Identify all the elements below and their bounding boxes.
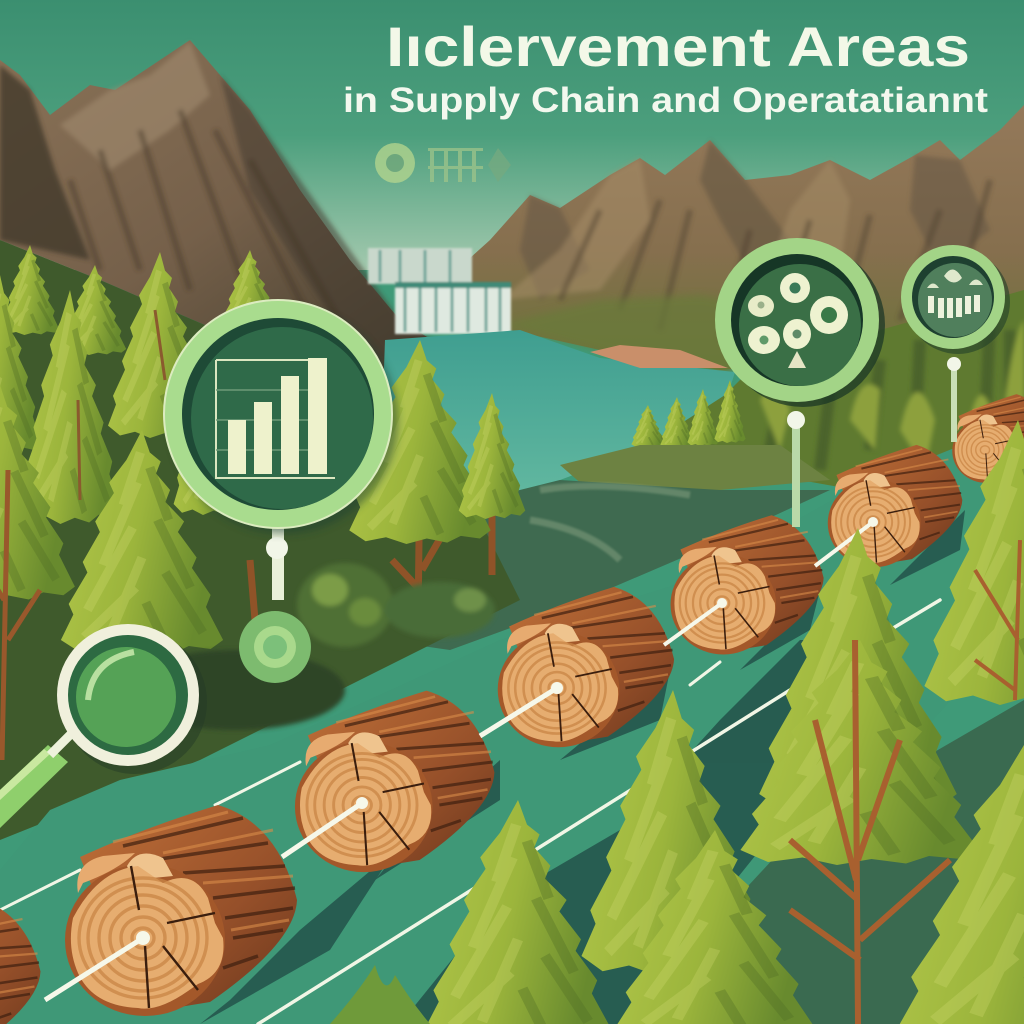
title: Iıclervement Areas bbox=[386, 15, 970, 78]
tree: bottom centre bbox=[424, 800, 612, 1024]
log 2 bbox=[65, 805, 297, 1016]
right mountain range bbox=[440, 105, 1024, 375]
right tree branches bbox=[975, 540, 1020, 700]
tree: bottom right-centre bbox=[616, 830, 814, 1024]
log 7 (far) bbox=[952, 394, 1024, 483]
connector lines and end dots on logs bbox=[45, 517, 878, 1000]
log 5 bbox=[671, 515, 824, 654]
dark forest backdrop left bbox=[0, 240, 520, 840]
magnifying glass lower left bbox=[0, 624, 207, 828]
lake bbox=[380, 330, 735, 500]
central trees by the lake bbox=[250, 340, 525, 622]
white connector lines bbox=[0, 600, 940, 1024]
log 3 bbox=[295, 691, 494, 872]
subtitle: in Supply Chain and Operatatiannt bbox=[343, 81, 988, 120]
ground shadows bbox=[200, 510, 965, 1024]
magnifier badge: columns bbox=[901, 245, 1010, 442]
log row bbox=[0, 394, 1024, 1024]
tree: far right tall bbox=[924, 420, 1024, 705]
small lakeside trees bbox=[631, 380, 746, 448]
dark ground under foreground trees bbox=[620, 700, 1024, 1024]
title bbox=[343, 15, 988, 120]
magnifier badge: circles bbox=[715, 238, 885, 527]
fern bbox=[330, 965, 430, 1024]
shrubs bbox=[125, 563, 495, 730]
log 1 (partial, left edge) bbox=[0, 900, 40, 1024]
left mountain bbox=[0, 40, 475, 370]
foreground trees bbox=[330, 420, 1024, 1024]
tree: centre conifer bbox=[759, 528, 957, 813]
log 4 bbox=[498, 587, 674, 747]
sky background bbox=[0, 0, 1024, 270]
shoreline midground bbox=[380, 445, 830, 650]
log 6 bbox=[828, 445, 962, 567]
tree: lower conifer bbox=[581, 690, 765, 975]
tree: bottom right corner bbox=[899, 745, 1024, 1024]
ground path bbox=[0, 420, 1024, 1024]
background trees left bbox=[0, 245, 279, 760]
magnifier badge: bar chart bbox=[164, 300, 398, 683]
right hillside forest bbox=[590, 290, 1024, 520]
tree: big with bare branches bbox=[740, 640, 980, 1024]
small faded icons under title bbox=[375, 143, 511, 183]
waterfall bbox=[368, 248, 511, 334]
